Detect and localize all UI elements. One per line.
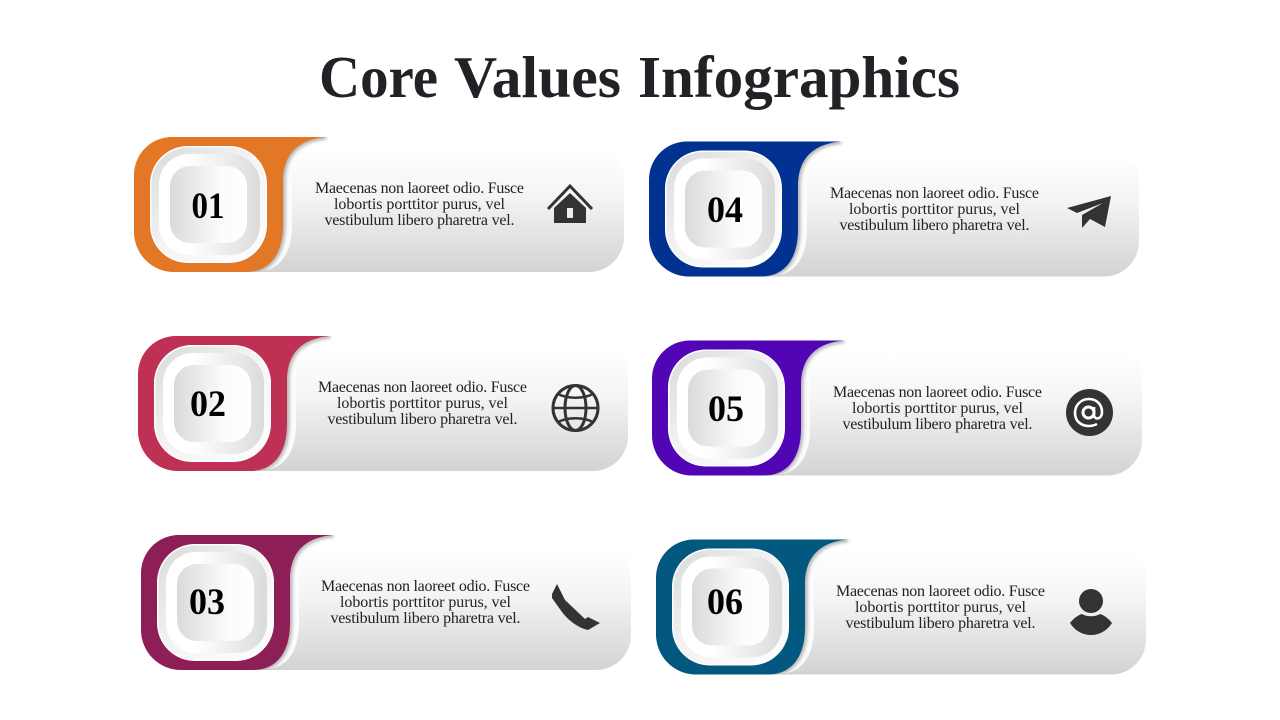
text block 03: Maecenas non laoreet odio. Fusce — [321, 578, 530, 595]
number 01: 01 — [192, 186, 224, 227]
icon: at sign — [1066, 389, 1113, 436]
text block 06: Maecenas non laoreet odio. Fusce — [836, 583, 1045, 600]
number 03: 03 — [189, 582, 225, 623]
text block 04: Maecenas non laoreet odio. Fusce — [830, 185, 1039, 202]
text block 02: Maecenas non laoreet odio. Fusce — [318, 379, 527, 396]
text block 01: vestibulum libero pharetra vel. — [324, 212, 514, 229]
text block 05: lobortis porttitor purus, vel — [852, 400, 1024, 417]
text block 02: lobortis porttitor purus, vel — [337, 395, 509, 412]
text block 04 — [830, 185, 1039, 234]
icon: house — [548, 186, 592, 223]
text block 01: lobortis porttitor purus, vel — [334, 196, 506, 213]
number 06: 06 — [707, 582, 743, 623]
panel: value 03 — [141, 535, 631, 670]
text block 05 — [833, 384, 1042, 433]
icon: globe — [553, 386, 598, 430]
title: Infographics — [638, 44, 960, 110]
text block 05: vestibulum libero pharetra vel. — [842, 416, 1032, 433]
number 05: 05 — [708, 389, 744, 430]
panel: value 06 — [656, 540, 1146, 674]
text block 04: vestibulum libero pharetra vel. — [840, 217, 1030, 234]
icon: paper plane — [1067, 196, 1111, 228]
text block 04: lobortis porttitor purus, vel — [849, 201, 1021, 218]
text block 01 — [315, 180, 524, 229]
panel: value 04 — [649, 142, 1139, 276]
number 04: 04 — [707, 190, 743, 231]
text block 03: vestibulum libero pharetra vel. — [330, 610, 520, 627]
title: Core — [319, 44, 438, 110]
text block 01: Maecenas non laoreet odio. Fusce — [315, 180, 524, 197]
text block 06: vestibulum libero pharetra vel. — [846, 615, 1036, 632]
text block 02: vestibulum libero pharetra vel. — [328, 411, 518, 428]
text block 03: lobortis porttitor purus, vel — [340, 594, 512, 611]
text block 02 — [318, 379, 527, 428]
panel: value 02 — [138, 336, 628, 471]
icon: phone — [552, 584, 600, 630]
text block 06: lobortis porttitor purus, vel — [855, 599, 1027, 616]
text block 03 — [321, 578, 530, 627]
panel: value 05 — [652, 340, 1142, 476]
title: Values — [454, 44, 621, 110]
panel: value 01 — [134, 137, 624, 272]
number 02: 02 — [190, 384, 226, 425]
text block 05: Maecenas non laoreet odio. Fusce — [833, 384, 1042, 401]
icon: person — [1070, 589, 1112, 635]
text block 06 — [836, 583, 1045, 632]
